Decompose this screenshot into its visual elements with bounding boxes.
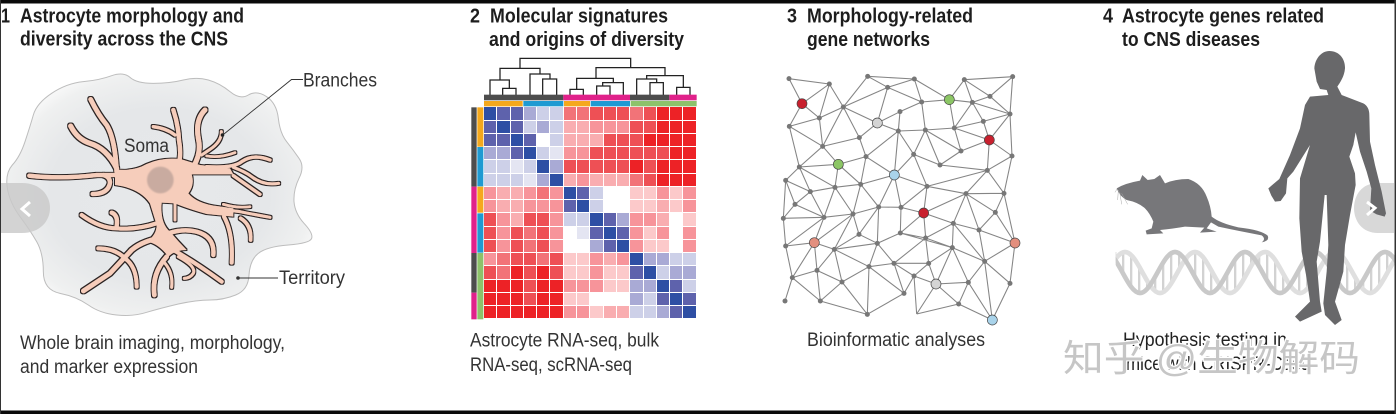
watermark: 知乎 @生物解码 (1063, 338, 1360, 379)
caption 1: and marker expression (20, 357, 198, 378)
soma nucleus (147, 167, 174, 193)
caption 2 (470, 330, 659, 376)
caption 2: Astrocyte RNA-seq, bulk (470, 330, 659, 352)
icon: mouse silhouette (1115, 175, 1268, 242)
icon: human silhouette (1268, 51, 1386, 325)
panel 4: DNA helix (1090, 252, 1396, 293)
heading 1 (1, 6, 244, 50)
heading 2 (470, 6, 685, 51)
caption 2: RNA-seq, scRNA-seq (470, 355, 632, 376)
heading 3: gene networks (807, 29, 930, 51)
panel 1: astrocyte illustration (7, 70, 377, 315)
caption 1: Whole brain imaging, morphology, (20, 333, 285, 354)
nav button right background (1354, 183, 1394, 233)
heading 4 (1103, 6, 1324, 51)
nav button left (0, 183, 50, 233)
caption 4: mice with CRISPR-Cas9 (1126, 354, 1310, 375)
chevron left (22, 202, 30, 216)
network small nodes (781, 74, 1015, 317)
heading 3 (787, 6, 973, 51)
panel 2: top colour bars (484, 95, 697, 106)
territory outline (7, 74, 312, 315)
heading 3: 3 (787, 6, 797, 28)
heading 4: 4 (1103, 6, 1114, 28)
chevron right (1367, 202, 1375, 215)
heading 2: Molecular signatures (490, 6, 668, 28)
network edges (783, 76, 1015, 320)
heading 3: Morphology-related (807, 6, 973, 28)
caption 4: Hypothesis testing in (1123, 330, 1287, 351)
panel 3: gene network (781, 74, 1020, 325)
heading 4: to CNS diseases (1122, 29, 1260, 51)
heading 2: and origins of diversity (489, 29, 685, 51)
caption 3: Bioinformatic analyses (807, 330, 985, 351)
heading 1: diversity across the CNS (20, 28, 228, 50)
label: Territory with leader: Territory (279, 268, 345, 289)
heading 1: 1 (1, 6, 10, 28)
heading 2: 2 (470, 6, 480, 28)
panel 2: dendrogram (490, 58, 690, 95)
heading 1: Astrocyte morphology and (20, 6, 244, 28)
astrocyte cell with branches (29, 99, 279, 295)
heading 4: Astrocyte genes related (1122, 6, 1324, 28)
label: Branches with leader: Branches (303, 70, 377, 92)
panel 2: expression heatmap (484, 107, 696, 318)
label: Soma: Soma (124, 136, 169, 157)
label: Territory with leader (236, 268, 345, 289)
network coloured nodes (797, 95, 1020, 325)
panel 2: side colour bars (471, 107, 483, 319)
caption 1 (20, 333, 285, 378)
label: Branches with leader (221, 70, 377, 137)
caption 4 (1123, 330, 1310, 375)
